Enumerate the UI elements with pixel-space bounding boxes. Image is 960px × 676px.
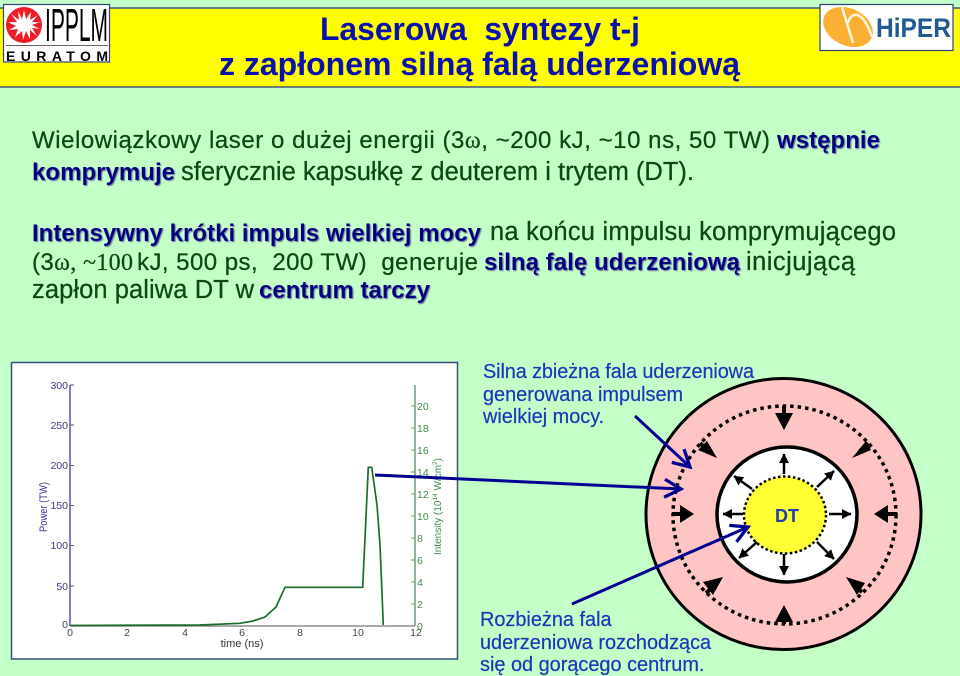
logo: IPPLM Euratom [4, 0, 110, 64]
right axis [411, 385, 444, 633]
left axis: 250 [50, 420, 68, 432]
title: z zapłonem silną falą uderzeniową [219, 46, 740, 82]
right axis: W/cm [433, 465, 444, 493]
right axis: 6 [417, 555, 423, 567]
left axis: 100 [50, 540, 68, 552]
right axis: 4 [417, 577, 423, 589]
title: Laserowa syntezy t-j [320, 11, 640, 47]
header band [0, 8, 960, 87]
arrow: caption to diverging front [572, 527, 748, 604]
caption: converging shock: wielkiej mocy. [482, 406, 604, 428]
bottom axis [67, 626, 422, 650]
right axis: 0 [417, 621, 423, 633]
caption: diverging shock: Rozbieżna fala [480, 609, 613, 631]
caption: converging shock: generowana impulsem [483, 384, 683, 406]
text block: second paragraph [32, 218, 896, 304]
text block: first paragraph: Wielowiązkowy laser o dużej energii (3ω, ~200 kJ, ~10 ns, 50 TW) [32, 127, 770, 154]
logo: HiPER [817, 0, 953, 55]
text block: second paragraph: inicjującą [746, 248, 856, 276]
caption: diverging shock [480, 609, 712, 676]
right axis: 14 [432, 493, 439, 501]
icon: orange ellipse [817, 0, 879, 55]
text block: first paragraph: komprymuje [32, 159, 175, 186]
caption: converging shock [482, 361, 755, 428]
DT core [744, 476, 826, 554]
title [219, 11, 740, 82]
logo subtitle: EURATOM [6, 48, 108, 64]
text block: second paragraph: centrum tarczy [259, 277, 431, 304]
left axis: 300 [50, 380, 68, 392]
left axis: 150 [50, 500, 68, 512]
right axis: 14 [417, 467, 429, 479]
left axis: 200 [50, 460, 68, 472]
left axis: 50 [56, 581, 68, 593]
inner white region [717, 447, 857, 582]
bottom axis: 10 [352, 627, 364, 639]
left axis: 0 [62, 619, 68, 631]
right axis: Intensity (10 [433, 501, 444, 555]
bottom axis: 8 [297, 627, 303, 639]
text block: second paragraph: zapłon paliwa DT w [32, 276, 255, 304]
text block: second paragraph: Intensywny krótki impuls wielkiej mocy [32, 220, 482, 247]
caption: converging shock: Silna zbieżna fala uderzeniowa [483, 361, 755, 383]
right axis: 20 [417, 401, 429, 413]
right axis: ) [433, 458, 444, 461]
text block: first paragraph [32, 127, 880, 186]
DT label: DT [775, 506, 799, 526]
bottom axis: 4 [182, 627, 188, 639]
caption: diverging shock: się od gorącego centrum. [480, 654, 704, 676]
outward arrows [723, 454, 851, 575]
bottom axis: 0 [67, 627, 73, 639]
bottom axis: 2 [124, 627, 130, 639]
text block: first paragraph: wstępnie [776, 127, 880, 154]
inward arrows [672, 406, 897, 624]
text block: second paragraph: (3ω, ~100 [32, 249, 133, 276]
text: IPPLM [45, 0, 108, 51]
bottom axis: 6 [239, 627, 245, 639]
right axis: 10 [417, 511, 429, 523]
outer shell [646, 378, 921, 650]
bottom axis: time (ns) [221, 638, 263, 650]
left axis: Power (TW) [38, 482, 50, 532]
text block: second paragraph: silną falę uderzeniową [484, 249, 741, 276]
left axis [38, 380, 74, 631]
chart: laser power versus time [12, 362, 458, 659]
caption: diverging shock: uderzeniowa rozchodząca [480, 632, 712, 654]
arrow: pulse peak to converging front [375, 475, 681, 489]
icon: red sun [6, 7, 42, 43]
text block: second paragraph: na końcu impulsu komprymującego [490, 218, 896, 246]
text block: second paragraph: kJ, 500 ps, 200 TW) generuje [137, 249, 478, 276]
pulse curve [70, 467, 383, 626]
right axis: 16 [417, 445, 429, 457]
bottom axis: 12 [410, 627, 422, 639]
logo wordmark: HiPER [876, 13, 951, 43]
right axis: 2 [417, 599, 423, 611]
arrow: caption to converging front [635, 416, 690, 467]
converging shock front [673, 406, 896, 624]
text block: first paragraph: sferycznie kapsułkę z deuterem i trytem (DT). [181, 158, 694, 186]
right axis: 18 [417, 423, 429, 435]
right axis: 2 [432, 461, 439, 465]
diagram: target cross-section [646, 378, 921, 650]
right axis: 12 [417, 489, 429, 501]
right axis: 8 [417, 533, 423, 545]
